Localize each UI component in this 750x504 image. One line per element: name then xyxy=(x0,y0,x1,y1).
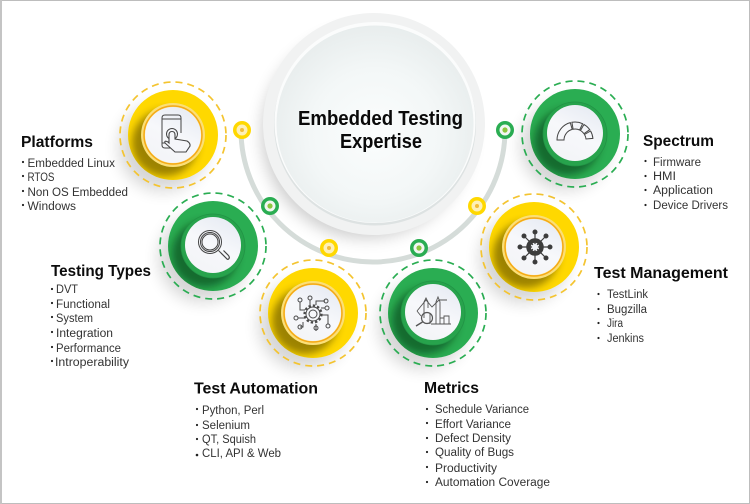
text block: Metrics: Automation Coverage xyxy=(435,477,550,489)
text block: Metrics xyxy=(424,380,550,489)
text block: Metrics: Schedule Variance xyxy=(435,404,529,416)
text block: Test Automation xyxy=(194,380,318,460)
text block: Spectrum: Application xyxy=(653,185,713,197)
text block: Platforms: Platforms xyxy=(21,134,93,151)
text block: Test Management xyxy=(594,265,728,345)
node markers on arc xyxy=(233,121,514,257)
text block: Test Management: Test Management xyxy=(594,265,728,282)
connector arc xyxy=(241,130,505,262)
text block: Metrics: Defect Density xyxy=(435,433,511,445)
icon: chart with magnifier xyxy=(416,297,451,326)
text block: Test Management: Jenkins xyxy=(607,333,644,345)
text block: Test Automation: Test Automation xyxy=(194,380,318,398)
text block: Metrics: Metrics xyxy=(424,380,479,397)
title xyxy=(298,108,463,153)
text block: Testing Types xyxy=(51,263,151,369)
badge: Metrics xyxy=(379,260,486,369)
text block: Testing Types: DVT xyxy=(56,284,78,296)
text block: Testing Types: Functional xyxy=(56,299,110,311)
icon: gauge xyxy=(557,122,593,140)
title: Embedded Testing xyxy=(298,108,463,130)
text block: Test Management: Jira xyxy=(607,318,624,330)
text block: Spectrum: HMI xyxy=(653,171,676,183)
badge: Platforms xyxy=(119,82,226,191)
text block: Spectrum: Firmware xyxy=(653,157,701,169)
text block: Metrics: Productivity xyxy=(435,463,497,475)
icon: magnifier xyxy=(198,230,229,259)
text block: Metrics: Quality of Bugs xyxy=(435,447,514,459)
text block: Test Management: Bugzilla xyxy=(607,304,648,316)
icon: phone touch xyxy=(162,115,190,152)
text block: Spectrum: Device Drivers xyxy=(653,200,728,212)
central circle: Embedded Testing Expertise xyxy=(262,13,485,238)
text block: Spectrum xyxy=(643,133,728,212)
text block: Platforms: Embedded Linux xyxy=(28,158,115,170)
text block: Test Automation: Python, Perl xyxy=(202,405,264,417)
badge: Spectrum xyxy=(521,81,628,190)
text block: Test Automation: CLI, API & Web xyxy=(202,448,281,460)
title: Expertise xyxy=(340,131,422,153)
badge: Testing Types xyxy=(159,193,266,302)
text block: Spectrum: Spectrum xyxy=(643,133,714,150)
icon: hub gear xyxy=(518,230,552,264)
text block: Testing Types: System xyxy=(56,313,93,325)
text block: Testing Types: Introperability xyxy=(55,357,129,369)
text block: Testing Types: Testing Types xyxy=(51,263,151,280)
text block: Test Automation: QT, Squish xyxy=(202,434,256,446)
text block: Testing Types: Integration xyxy=(56,328,113,340)
text block: Platforms: Non OS Embedded xyxy=(28,187,128,199)
text block: Test Automation: Selenium xyxy=(202,420,250,432)
text block: Test Management: TestLink xyxy=(607,289,648,301)
badge: Test Automation xyxy=(259,260,366,369)
text block: Platforms: RTOS xyxy=(28,172,55,184)
text block: Platforms xyxy=(21,134,128,213)
badge: Test Management xyxy=(480,194,587,303)
icon: gear network xyxy=(294,296,330,331)
text block: Testing Types: Performance xyxy=(56,343,121,355)
text block: Platforms: Windows xyxy=(28,201,76,213)
text block: Metrics: Effort Variance xyxy=(435,419,511,431)
